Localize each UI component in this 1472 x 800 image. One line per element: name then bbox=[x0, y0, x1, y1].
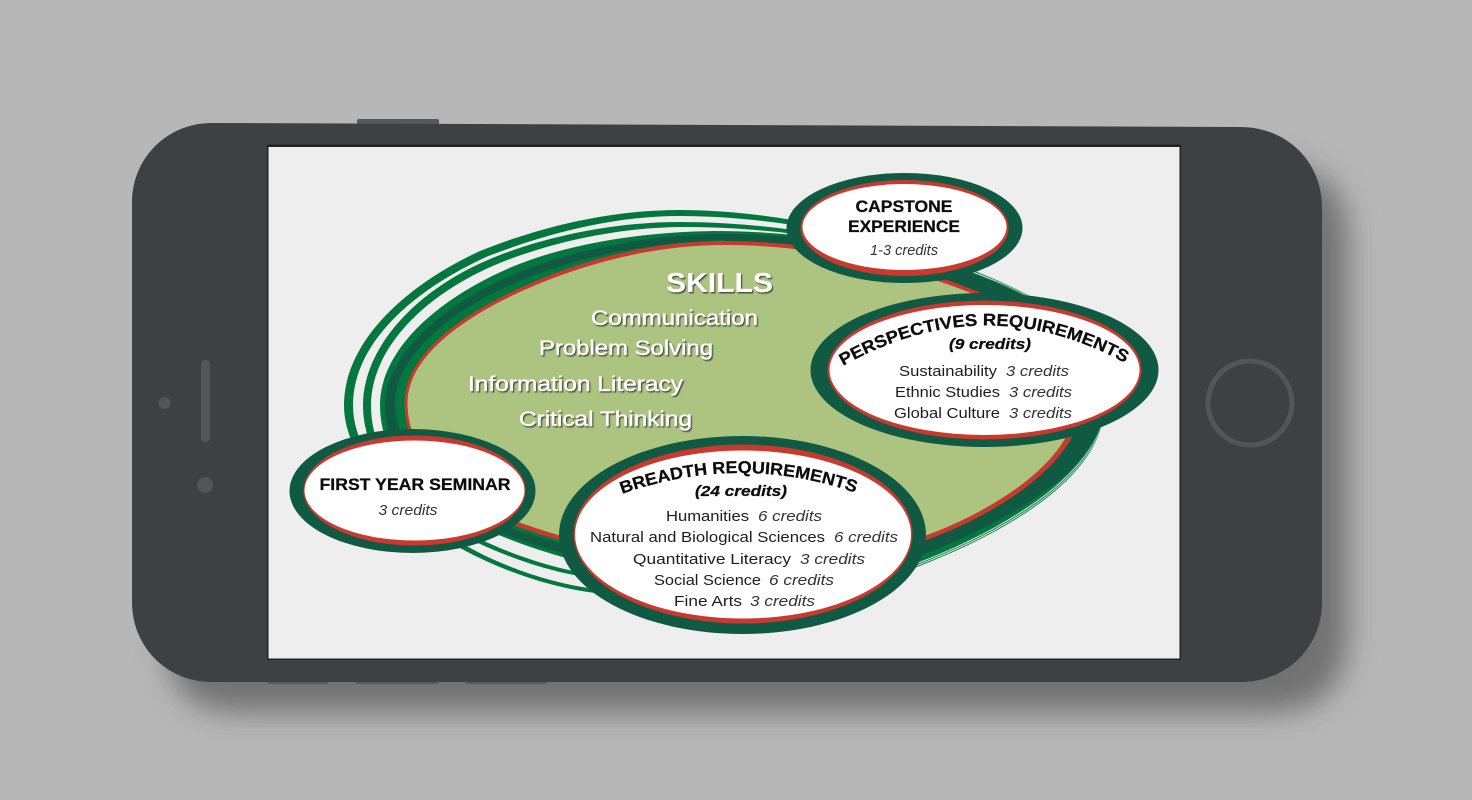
panel: breadth requirements: 3 credits bbox=[800, 551, 866, 568]
panel: perspectives requirements: Global Culture bbox=[894, 405, 1000, 422]
panel: perspectives requirements: Sustainability bbox=[899, 363, 998, 380]
top button bbox=[357, 119, 439, 127]
panel: breadth requirements bbox=[559, 436, 926, 634]
skills list: Critical Thinking bbox=[519, 408, 692, 431]
panel: perspectives requirements: Ethnic Studies bbox=[895, 384, 1000, 401]
panel: breadth requirements: Natural and Biological Sciences bbox=[590, 529, 825, 546]
skills heading: SKILLS bbox=[666, 267, 773, 298]
skills list: Communication bbox=[591, 307, 758, 330]
skills green area bbox=[408, 245, 1079, 565]
panel: breadth requirements: Quantitative Literacy bbox=[633, 551, 792, 568]
panel: capstone experience: CAPSTONE bbox=[856, 197, 952, 216]
panel: capstone experience bbox=[786, 173, 1022, 283]
panel: breadth requirements: Fine Arts bbox=[674, 593, 742, 610]
panel: breadth requirements: 6 credits bbox=[769, 572, 835, 589]
skills list bbox=[468, 307, 758, 431]
panel: perspectives requirements: 3 credits bbox=[1006, 363, 1070, 380]
inner green stripe bbox=[395, 240, 770, 556]
panel: breadth requirements: Humanities bbox=[666, 508, 749, 525]
panel: perspectives requirements: 3 credits bbox=[1009, 384, 1073, 401]
skills list: Problem Solving bbox=[539, 337, 713, 360]
skills ellipse rings bbox=[344, 210, 1103, 604]
panel: breadth requirements: 6 credits bbox=[758, 508, 823, 525]
panel: perspectives requirements: 3 credits bbox=[1009, 405, 1073, 422]
phone shadow bbox=[165, 165, 1348, 712]
bottom buttons bbox=[268, 678, 546, 684]
camera dot bbox=[158, 397, 170, 409]
panel: perspectives requirements: (9 credits) bbox=[949, 336, 1031, 353]
panel: breadth requirements: 3 credits bbox=[750, 593, 816, 610]
panel: perspectives requirements: PERSPECTIVES REQUIREMENTS bbox=[838, 314, 1129, 366]
panel: capstone experience: EXPERIENCE bbox=[848, 217, 960, 236]
home button bbox=[1208, 361, 1292, 445]
panel: breadth requirements: Social Science bbox=[654, 572, 761, 589]
panel: capstone experience: 1-3 credits bbox=[870, 242, 938, 259]
panel: perspectives requirements bbox=[810, 293, 1158, 447]
panel: breadth requirements: 6 credits bbox=[834, 529, 899, 546]
speaker slot bbox=[201, 360, 210, 442]
screen bbox=[267, 144, 1181, 660]
skills list: Information Literacy bbox=[468, 373, 684, 396]
panel: first year seminar bbox=[290, 429, 536, 553]
sensor dot bbox=[197, 477, 213, 493]
skills red edge bbox=[404, 241, 1084, 570]
phone body bbox=[132, 123, 1322, 682]
panel: first year seminar: FIRST YEAR SEMINAR bbox=[320, 475, 510, 494]
panel: first year seminar: 3 credits bbox=[378, 502, 438, 519]
dark band bbox=[385, 234, 1102, 578]
panel: breadth requirements: (24 credits) bbox=[695, 483, 787, 500]
phone device bbox=[132, 119, 1348, 712]
panel: breadth requirements: BREADTH REQUIREMENTS bbox=[619, 461, 858, 494]
